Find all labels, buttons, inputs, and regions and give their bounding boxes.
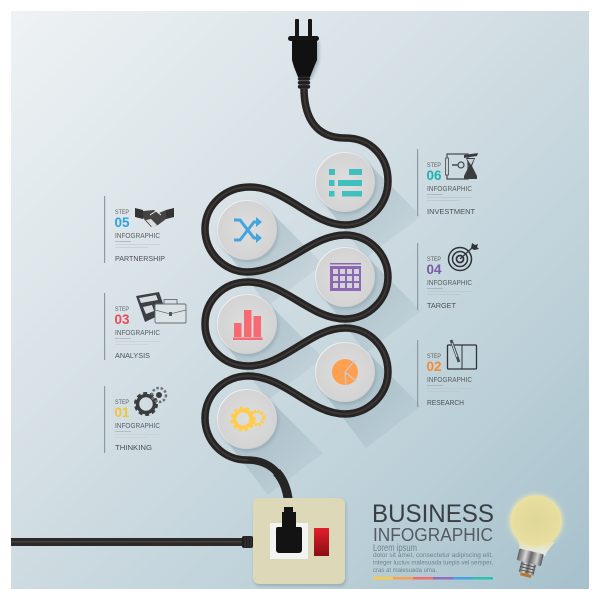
icon: safe and hourglass <box>446 153 478 179</box>
step 05 partnership: PARTNERSHIP <box>115 254 165 263</box>
icon: target <box>448 243 479 270</box>
step 01 thinking: INFOGRAPHIC <box>115 421 160 430</box>
step 02 research: STEP <box>427 354 441 360</box>
step 03 analysis: STEP <box>115 307 129 313</box>
step 04 target: INFOGRAPHIC <box>427 278 472 287</box>
description text: integer luctus malesuada tuepis vel semper, <box>373 560 493 566</box>
icon: calendar <box>330 263 361 291</box>
step 03 analysis <box>104 292 186 360</box>
icon: light bulb <box>509 494 563 580</box>
step 06 investment: INFOGRAPHIC <box>427 184 472 193</box>
description text <box>373 542 493 574</box>
step 01 thinking: THINKING <box>115 443 152 452</box>
step 05 partnership: STEP <box>115 210 129 216</box>
long shadows of discs <box>226 161 421 495</box>
icon: wall plug <box>288 19 319 88</box>
title: business infographic: INFOGRAPHIC <box>373 525 493 545</box>
icon: handshake <box>135 208 174 227</box>
step 06 investment <box>417 149 478 216</box>
colour bar <box>373 577 493 580</box>
step 06 investment: INVESTMENT <box>427 207 475 216</box>
icon: pie chart <box>332 359 358 385</box>
step 03 analysis: 03 <box>114 311 130 327</box>
icon: list <box>329 169 362 196</box>
icon: book and pen <box>448 340 476 369</box>
icon: newspaper and briefcase <box>136 292 186 323</box>
icon: shuffle <box>234 217 262 243</box>
wall socket <box>253 498 346 586</box>
icon: bar chart <box>233 310 262 340</box>
step 02 research: RESEARCH <box>427 398 464 407</box>
step 06 investment: 06 <box>426 167 442 183</box>
step discs <box>218 152 376 451</box>
step 01 thinking <box>104 386 166 453</box>
step 02 research: INFOGRAPHIC <box>427 375 472 384</box>
step 04 target <box>417 243 479 310</box>
step 01 thinking: STEP <box>115 400 129 406</box>
step 06 investment: STEP <box>427 163 441 169</box>
description text: dolor sit amet, consectetur adipiscing elit, <box>373 552 493 559</box>
step 04 target: TARGET <box>427 301 456 310</box>
left mains cable <box>11 536 253 548</box>
step 04 target: STEP <box>427 257 441 263</box>
icon: gears <box>234 410 264 428</box>
step 03 analysis: ANALYSIS <box>115 351 150 360</box>
step 02 research <box>417 340 476 407</box>
description text: cras at malesuada uma. <box>373 567 437 574</box>
power cable <box>205 88 388 512</box>
step 04 target: 04 <box>426 261 442 277</box>
step 03 analysis: INFOGRAPHIC <box>115 328 160 337</box>
step 05 partnership: 05 <box>114 214 130 230</box>
step 05 partnership: INFOGRAPHIC <box>115 231 160 240</box>
title: business infographic: BUSINESS <box>372 500 494 528</box>
description text: Lorem ipsum <box>373 542 417 554</box>
step 01 thinking: 01 <box>114 404 130 420</box>
step 05 partnership <box>104 196 174 263</box>
title: business infographic <box>372 500 494 545</box>
step 02 research: 02 <box>426 358 442 374</box>
icon: thinking gears <box>136 388 166 414</box>
